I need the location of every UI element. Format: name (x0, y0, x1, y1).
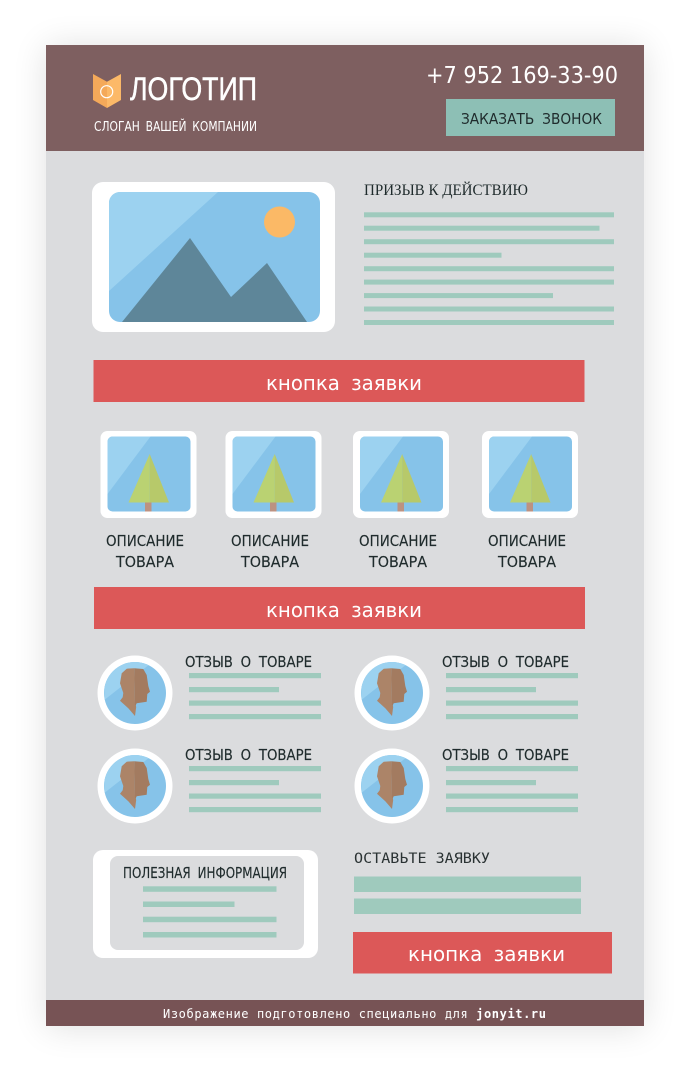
footer band (46, 1000, 644, 1026)
useful info panel (93, 850, 318, 958)
review 4 (354, 746, 578, 824)
product 1: ТОВАРА (115, 553, 175, 571)
product 3 (353, 431, 449, 571)
review 3: ОТЗЫВ О ТОВАРЕ (185, 746, 312, 764)
form field 2 (354, 898, 581, 914)
product 2: ОПИСАНИЕ (231, 532, 309, 550)
red button 1: кнопка заявки (266, 371, 422, 395)
slogan: СЛОГАН ВАШЕЙ КОМПАНИИ (94, 117, 257, 135)
review 4: ОТЗЫВ О ТОВАРЕ (442, 746, 569, 764)
product 4 (482, 431, 578, 571)
form field 1 (354, 876, 581, 892)
product 3: ТОВАРА (368, 553, 428, 571)
product 4: ТОВАРА (497, 553, 557, 571)
page card background (46, 45, 644, 1026)
icon: logo shield (93, 74, 121, 108)
review 2: ОТЗЫВ О ТОВАРЕ (442, 653, 569, 671)
review 1: ОТЗЫВ О ТОВАРЕ (185, 653, 312, 671)
product 1 (100, 431, 196, 571)
call to action text lines (364, 212, 614, 325)
product 1: ОПИСАНИЕ (106, 532, 184, 550)
product 3: ОПИСАНИЕ (359, 532, 437, 550)
product 4: ОПИСАНИЕ (488, 532, 566, 550)
card shadow (46, 46, 644, 1028)
review 3 (98, 746, 321, 824)
product 2 (226, 431, 322, 571)
button: order a call (446, 99, 615, 136)
review 1 (98, 653, 321, 730)
footer band: Изображение подготовлено специально для jonyit.ru (163, 1007, 546, 1021)
call to action heading: ПРИЗЫВ К ДЕЙСТВИЮ (364, 182, 528, 199)
red button 3 (353, 932, 612, 974)
phone number: +7 952 169-33-90 (426, 63, 618, 89)
red button 2 (94, 587, 585, 629)
red button 1 (94, 360, 584, 402)
useful info panel: ПОЛЕЗНАЯ ИНФОРМАЦИЯ (123, 864, 287, 882)
review 2 (354, 653, 578, 730)
red button 3: кнопка заявки (408, 942, 565, 966)
red button 2: кнопка заявки (266, 598, 422, 622)
logo wordmark: ЛОГОТИП (130, 71, 257, 107)
product 2: ТОВАРА (240, 553, 300, 571)
request form heading: ОСТАВЬТЕ ЗАЯВКУ (354, 851, 490, 867)
button: order a call: ЗАКАЗАТЬ ЗВОНОК (461, 110, 602, 128)
hero image placeholder (92, 182, 335, 332)
header band (46, 45, 644, 151)
